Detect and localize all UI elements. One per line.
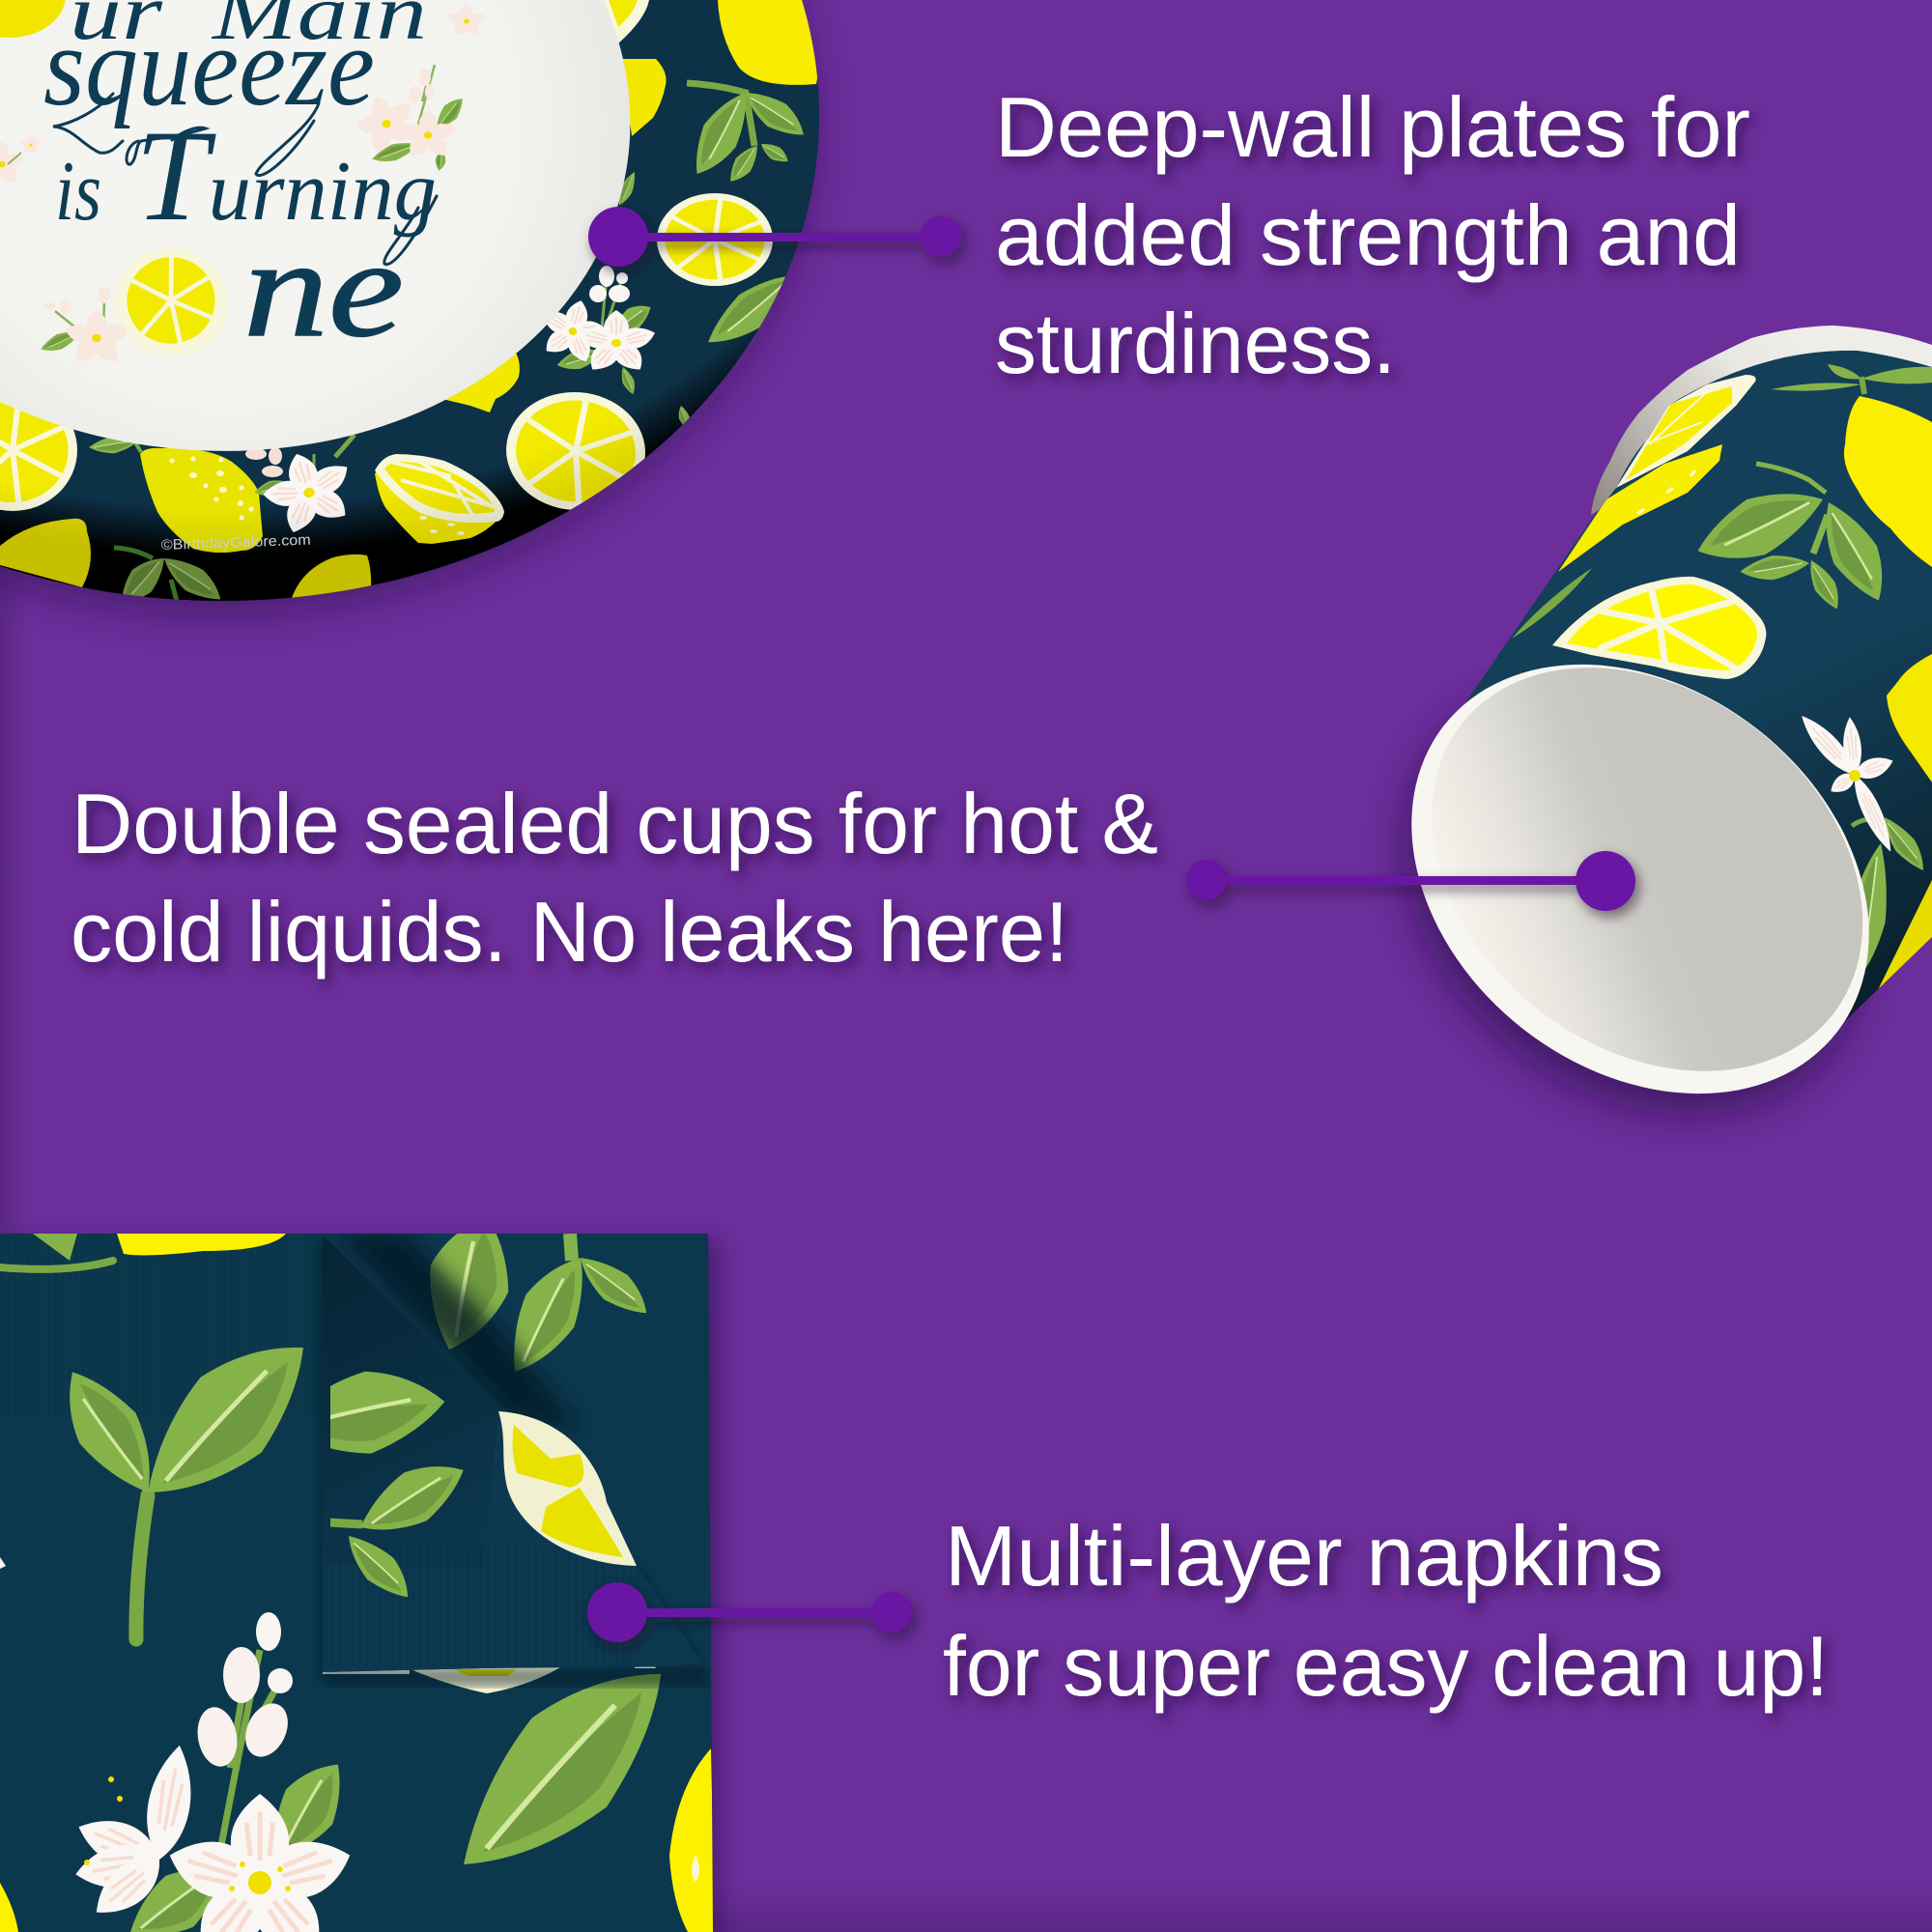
script swashes bbox=[53, 94, 437, 265]
plate lemon slice motif bbox=[0, 0, 229, 357]
panel: paper cup bbox=[1389, 326, 1932, 1130]
text block: napkins bbox=[943, 1508, 1829, 1714]
napkin sprout leaves bbox=[45, 1312, 336, 1639]
plate script message bbox=[43, 0, 437, 366]
cup base bbox=[1326, 576, 1932, 1182]
plate floral motifs bbox=[0, 4, 488, 367]
text block: cups: Double sealed cups for hot & bbox=[71, 776, 1158, 871]
plate script message: is bbox=[55, 145, 101, 239]
text block: napkins: for super easy clean up! bbox=[943, 1618, 1829, 1714]
text block: plates: Deep-wall plates for bbox=[995, 79, 1750, 175]
napkin lower lemon edge bbox=[411, 1663, 567, 1693]
callout connector: napkin bbox=[587, 1582, 912, 1642]
watermark: ©BirthdayGalore.com bbox=[161, 532, 311, 554]
text block: napkins: Multi-layer napkins bbox=[945, 1508, 1663, 1604]
napkin right lemon bbox=[669, 1748, 715, 1932]
plate whole lemon bbox=[140, 448, 263, 553]
napkin fold shadow bbox=[315, 1241, 330, 1672]
plate script message: Turning bbox=[135, 104, 437, 248]
cup flower bbox=[1794, 709, 1899, 856]
napkin top pattern pieces bbox=[0, 1234, 286, 1269]
cup lemon slice bbox=[1552, 577, 1766, 679]
plate script message: ne bbox=[243, 212, 404, 366]
plate rim with lemon pattern bbox=[0, 0, 831, 618]
napkin big leaf bbox=[423, 1633, 701, 1906]
text block: plates: added strength and bbox=[995, 187, 1741, 283]
cup lemon peel bbox=[1558, 444, 1722, 572]
napkin folded lemon wedge bbox=[498, 1411, 637, 1566]
plate white centre bbox=[0, 0, 676, 506]
napkin blossoms bbox=[71, 1612, 362, 1932]
napkin folded flap bbox=[274, 1206, 709, 1672]
text block: plates: sturdiness. bbox=[995, 296, 1396, 391]
cup top lemon slice bbox=[1616, 375, 1756, 488]
panel: napkin bbox=[0, 1206, 720, 1932]
plate cut lemon wedge bbox=[375, 454, 504, 544]
text block: plates bbox=[995, 79, 1750, 391]
text block: cups bbox=[71, 776, 1158, 980]
text block: cups: cold liquids. No leaks here! bbox=[71, 884, 1068, 980]
callout connector: plate bbox=[588, 207, 961, 267]
cup body with lemon pattern bbox=[1464, 350, 1932, 1022]
callout connector: cup bbox=[1186, 851, 1635, 911]
plate script message: squeeze bbox=[43, 3, 375, 129]
cup rim bbox=[1591, 326, 1932, 515]
panel: paper plate bbox=[0, 0, 831, 618]
